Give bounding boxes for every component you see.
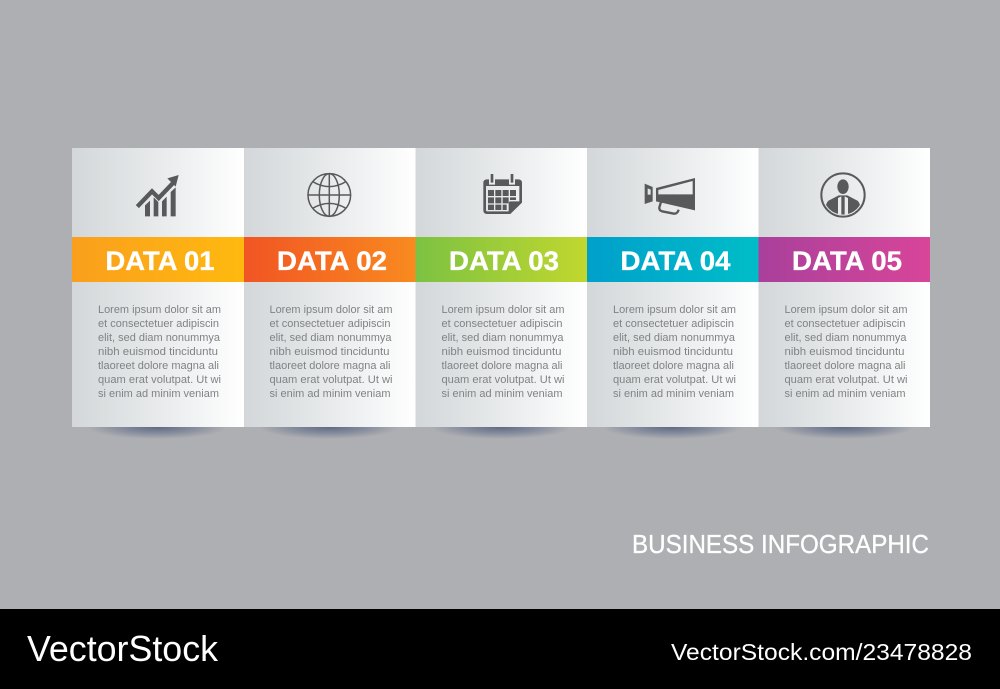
text block: data 01: tlaoreet dolore magna ali — [98, 360, 219, 372]
text block: data 04: tlaoreet dolore magna ali — [613, 360, 734, 372]
text block: data 04: Lorem ipsum dolor sit am — [613, 304, 736, 316]
text block: data 02: et consectetuer adipiscin — [270, 318, 390, 330]
text block: data 04: quam erat volutpat. Ut wi — [613, 374, 736, 386]
text block: data 03: nibh euismod tinciduntu — [442, 346, 562, 358]
text block: data 01: et consectetuer adipiscin — [98, 318, 219, 330]
text block: data 03: tlaoreet dolore magna ali — [442, 360, 562, 372]
title: business infographic: BUSINESS INFOGRAPHIC — [632, 531, 929, 559]
text block: data 02: Lorem ipsum dolor sit am — [270, 304, 392, 316]
icon: businessman — [821, 173, 865, 217]
colour band: data 04 — [587, 237, 758, 282]
text block: data 04 — [613, 304, 736, 400]
panel: data 03 — [416, 148, 587, 427]
panel: data 04 — [587, 148, 758, 427]
heading: data 04: DATA 04 — [620, 246, 731, 276]
icon: calendar — [483, 172, 522, 214]
colour band: data 03 — [416, 237, 587, 282]
text block: data 05: si enim ad minim veniam — [784, 388, 906, 400]
text block: data 03: et consectetuer adipiscin — [442, 318, 562, 330]
footer image id: VectorStock.com/23478828 — [671, 639, 972, 665]
heading: data 05: DATA 05 — [792, 246, 902, 276]
text block: data 03: elit, sed diam nonummya — [442, 332, 564, 344]
heading: data 01: DATA 01 — [106, 246, 214, 276]
text block: data 01: si enim ad minim veniam — [98, 388, 219, 400]
text block: data 02: tlaoreet dolore magna ali — [270, 360, 390, 372]
text block: data 02: quam erat volutpat. Ut wi — [270, 374, 392, 386]
text block: data 01: Lorem ipsum dolor sit am — [98, 304, 221, 316]
text block: data 05: quam erat volutpat. Ut wi — [784, 374, 908, 386]
text block: data 02: si enim ad minim veniam — [270, 388, 390, 400]
text block: data 04: si enim ad minim veniam — [613, 388, 734, 400]
text block: data 02: nibh euismod tinciduntu — [270, 346, 390, 358]
text block: data 04: nibh euismod tinciduntu — [613, 346, 733, 358]
heading: data 03: DATA 03 — [449, 246, 559, 276]
text block: data 03: Lorem ipsum dolor sit am — [442, 304, 564, 316]
icon: rising bar chart — [137, 175, 179, 216]
text block: data 01: quam erat volutpat. Ut wi — [98, 374, 221, 386]
text block: data 03 — [442, 304, 564, 400]
colour band: data 05 — [758, 237, 930, 282]
colour band: data 02 — [244, 237, 416, 282]
text block: data 04: elit, sed diam nonummya — [613, 332, 736, 344]
text block: data 01: nibh euismod tinciduntu — [98, 346, 218, 358]
text block: data 05: tlaoreet dolore magna ali — [784, 360, 906, 372]
text block: data 03: si enim ad minim veniam — [442, 388, 562, 400]
heading: data 02: DATA 02 — [277, 246, 387, 276]
text block: data 02 — [270, 304, 392, 400]
text block: data 05: Lorem ipsum dolor sit am — [784, 304, 908, 316]
text block: data 02: elit, sed diam nonummya — [270, 332, 392, 344]
icon: globe — [308, 174, 351, 216]
panel shadows — [87, 415, 914, 439]
text block: data 05: elit, sed diam nonummya — [784, 332, 907, 344]
text block: data 03: quam erat volutpat. Ut wi — [442, 374, 564, 386]
text block: data 01 — [98, 304, 221, 400]
panel: data 05 — [758, 148, 930, 427]
text block: data 01: elit, sed diam nonummya — [98, 332, 221, 344]
colour band: data 01 — [72, 237, 244, 282]
footer bar — [0, 609, 1000, 689]
panel: data 01 — [72, 148, 244, 427]
text block: data 05: et consectetuer adipiscin — [784, 318, 906, 330]
icon: megaphone — [645, 178, 695, 214]
text block: data 05 — [784, 304, 908, 400]
text block: data 04: et consectetuer adipiscin — [613, 318, 734, 330]
panel: data 02 — [244, 148, 416, 427]
text block: data 05: nibh euismod tinciduntu — [784, 346, 904, 358]
footer logo: VectorStock — [27, 628, 219, 669]
